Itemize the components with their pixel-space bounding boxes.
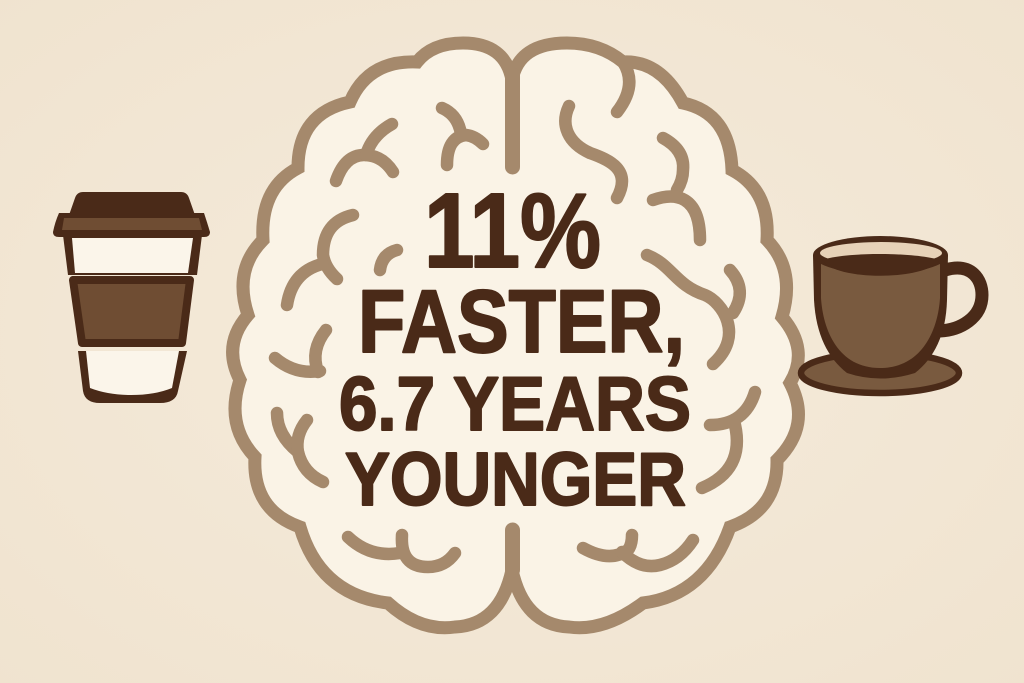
saucer — [801, 353, 959, 393]
brain folds — [275, 62, 755, 570]
coffee surface — [822, 254, 940, 276]
lid rim — [53, 213, 210, 237]
brain outline — [233, 43, 798, 628]
lid rim band — [62, 218, 202, 230]
cup lid — [68, 192, 196, 218]
mug handle — [940, 268, 982, 331]
line: 11%: 11% — [424, 172, 601, 290]
cup upper white panel — [72, 238, 193, 273]
icon: coffee mug with saucer — [801, 236, 982, 393]
line: FASTER,: FASTER, — [358, 271, 685, 371]
cup sleeve — [73, 280, 190, 343]
mug inner body — [821, 262, 940, 368]
line: 6.7 YEARS: 6.7 YEARS — [339, 362, 691, 447]
cup lower white panel — [86, 351, 179, 395]
cup upper body — [63, 235, 202, 275]
cup lower body — [78, 351, 187, 403]
line: YOUNGER: YOUNGER — [345, 437, 686, 521]
mug rim — [813, 236, 948, 274]
mug inner rim — [820, 242, 942, 264]
mug outer body — [813, 255, 948, 378]
icon: takeaway coffee cup — [53, 192, 210, 403]
brain illustration — [233, 43, 798, 628]
headline text — [339, 172, 691, 521]
